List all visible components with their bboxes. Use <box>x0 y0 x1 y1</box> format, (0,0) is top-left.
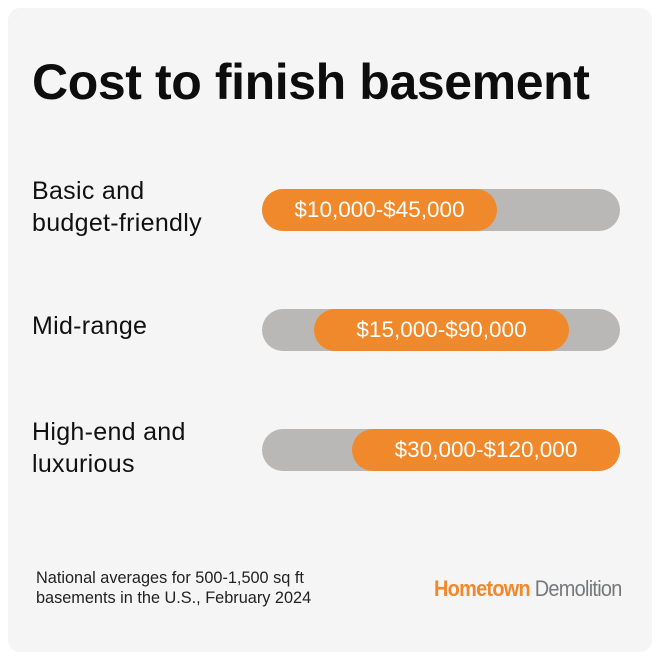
range: high-end: $30,000-$120,000 <box>395 437 577 462</box>
label: high-end: High-end and <box>32 418 186 446</box>
range: mid-range: $15,000-$90,000 <box>356 317 527 342</box>
label: mid-range: Mid-range <box>32 312 147 340</box>
footnote: basements in the U.S., February 2024 <box>36 589 311 607</box>
range: mid-range <box>314 309 569 351</box>
range: high-end <box>352 429 620 471</box>
label: basic: budget-friendly <box>32 209 202 237</box>
bar: basic <box>262 189 620 231</box>
title: Cost to finish basement <box>32 54 590 110</box>
footnote: National averages for 500-1,500 sq ft <box>36 569 304 587</box>
footnote <box>36 569 311 607</box>
label: high-end: luxurious <box>32 450 135 478</box>
bar: high-end <box>262 429 620 471</box>
logo: Hometown Demolition <box>434 576 622 601</box>
label: basic <box>32 177 202 237</box>
label: high-end <box>32 418 186 478</box>
range: basic <box>262 189 497 231</box>
range: basic: $10,000-$45,000 <box>294 197 465 222</box>
label: basic: Basic and <box>32 177 144 205</box>
bar: mid-range <box>262 309 620 351</box>
